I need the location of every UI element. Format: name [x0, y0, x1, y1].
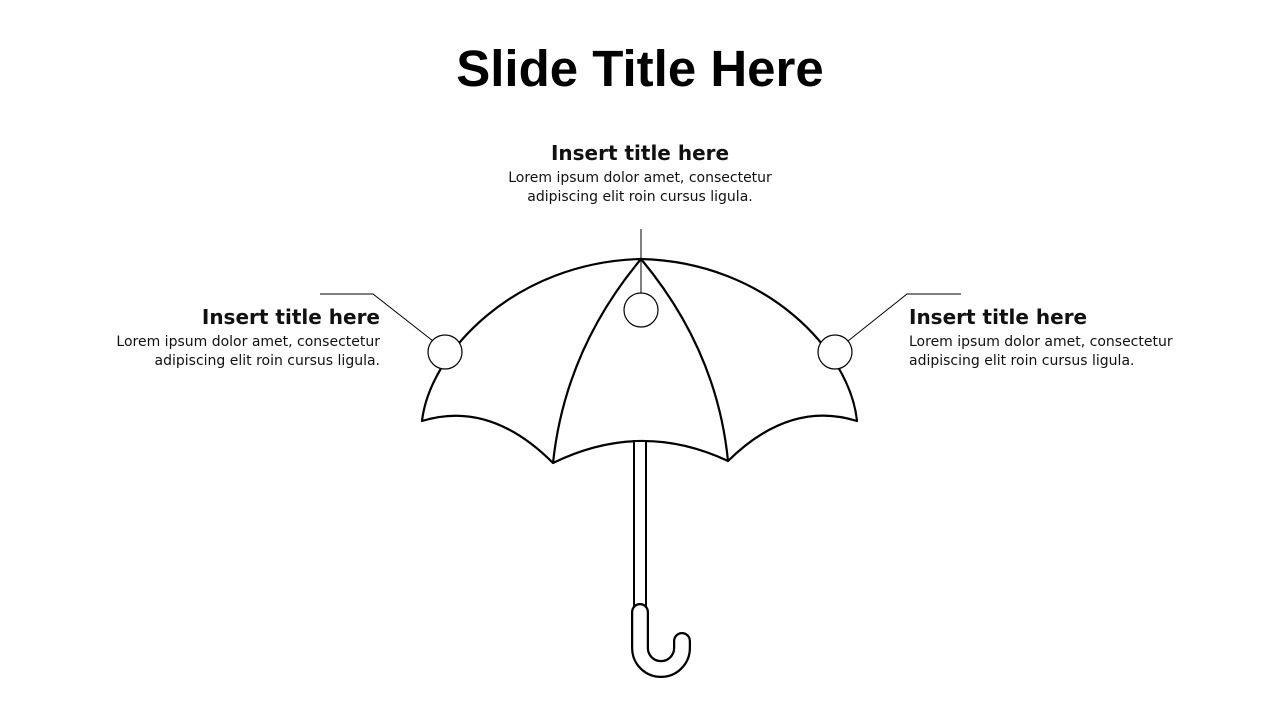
- text block: left: adipiscing elit roin cursus ligula.: [155, 353, 380, 369]
- text block: top: Insert title here: [551, 141, 729, 165]
- text block: right: adipiscing elit roin cursus ligula.: [909, 353, 1134, 369]
- title: Slide Title Here: [456, 40, 824, 97]
- umbrella handle: [640, 612, 682, 669]
- text block: top: [508, 141, 772, 205]
- text block: left: [116, 305, 380, 369]
- text block: left: Insert title here: [202, 305, 380, 329]
- text block: right: Insert title here: [909, 305, 1087, 329]
- connector lines: [320, 229, 961, 341]
- text block: right: Lorem ipsum dolor amet, consectetur: [909, 334, 1173, 350]
- text block: top: Lorem ipsum dolor amet, consectetur: [508, 170, 772, 186]
- text block: right: [909, 305, 1173, 369]
- markers: [428, 293, 852, 369]
- umbrella shaft: [634, 441, 646, 611]
- umbrella canopy: [422, 259, 857, 463]
- text block: left: Lorem ipsum dolor amet, consectetur: [116, 334, 380, 350]
- text block: top: adipiscing elit roin cursus ligula.: [527, 189, 753, 205]
